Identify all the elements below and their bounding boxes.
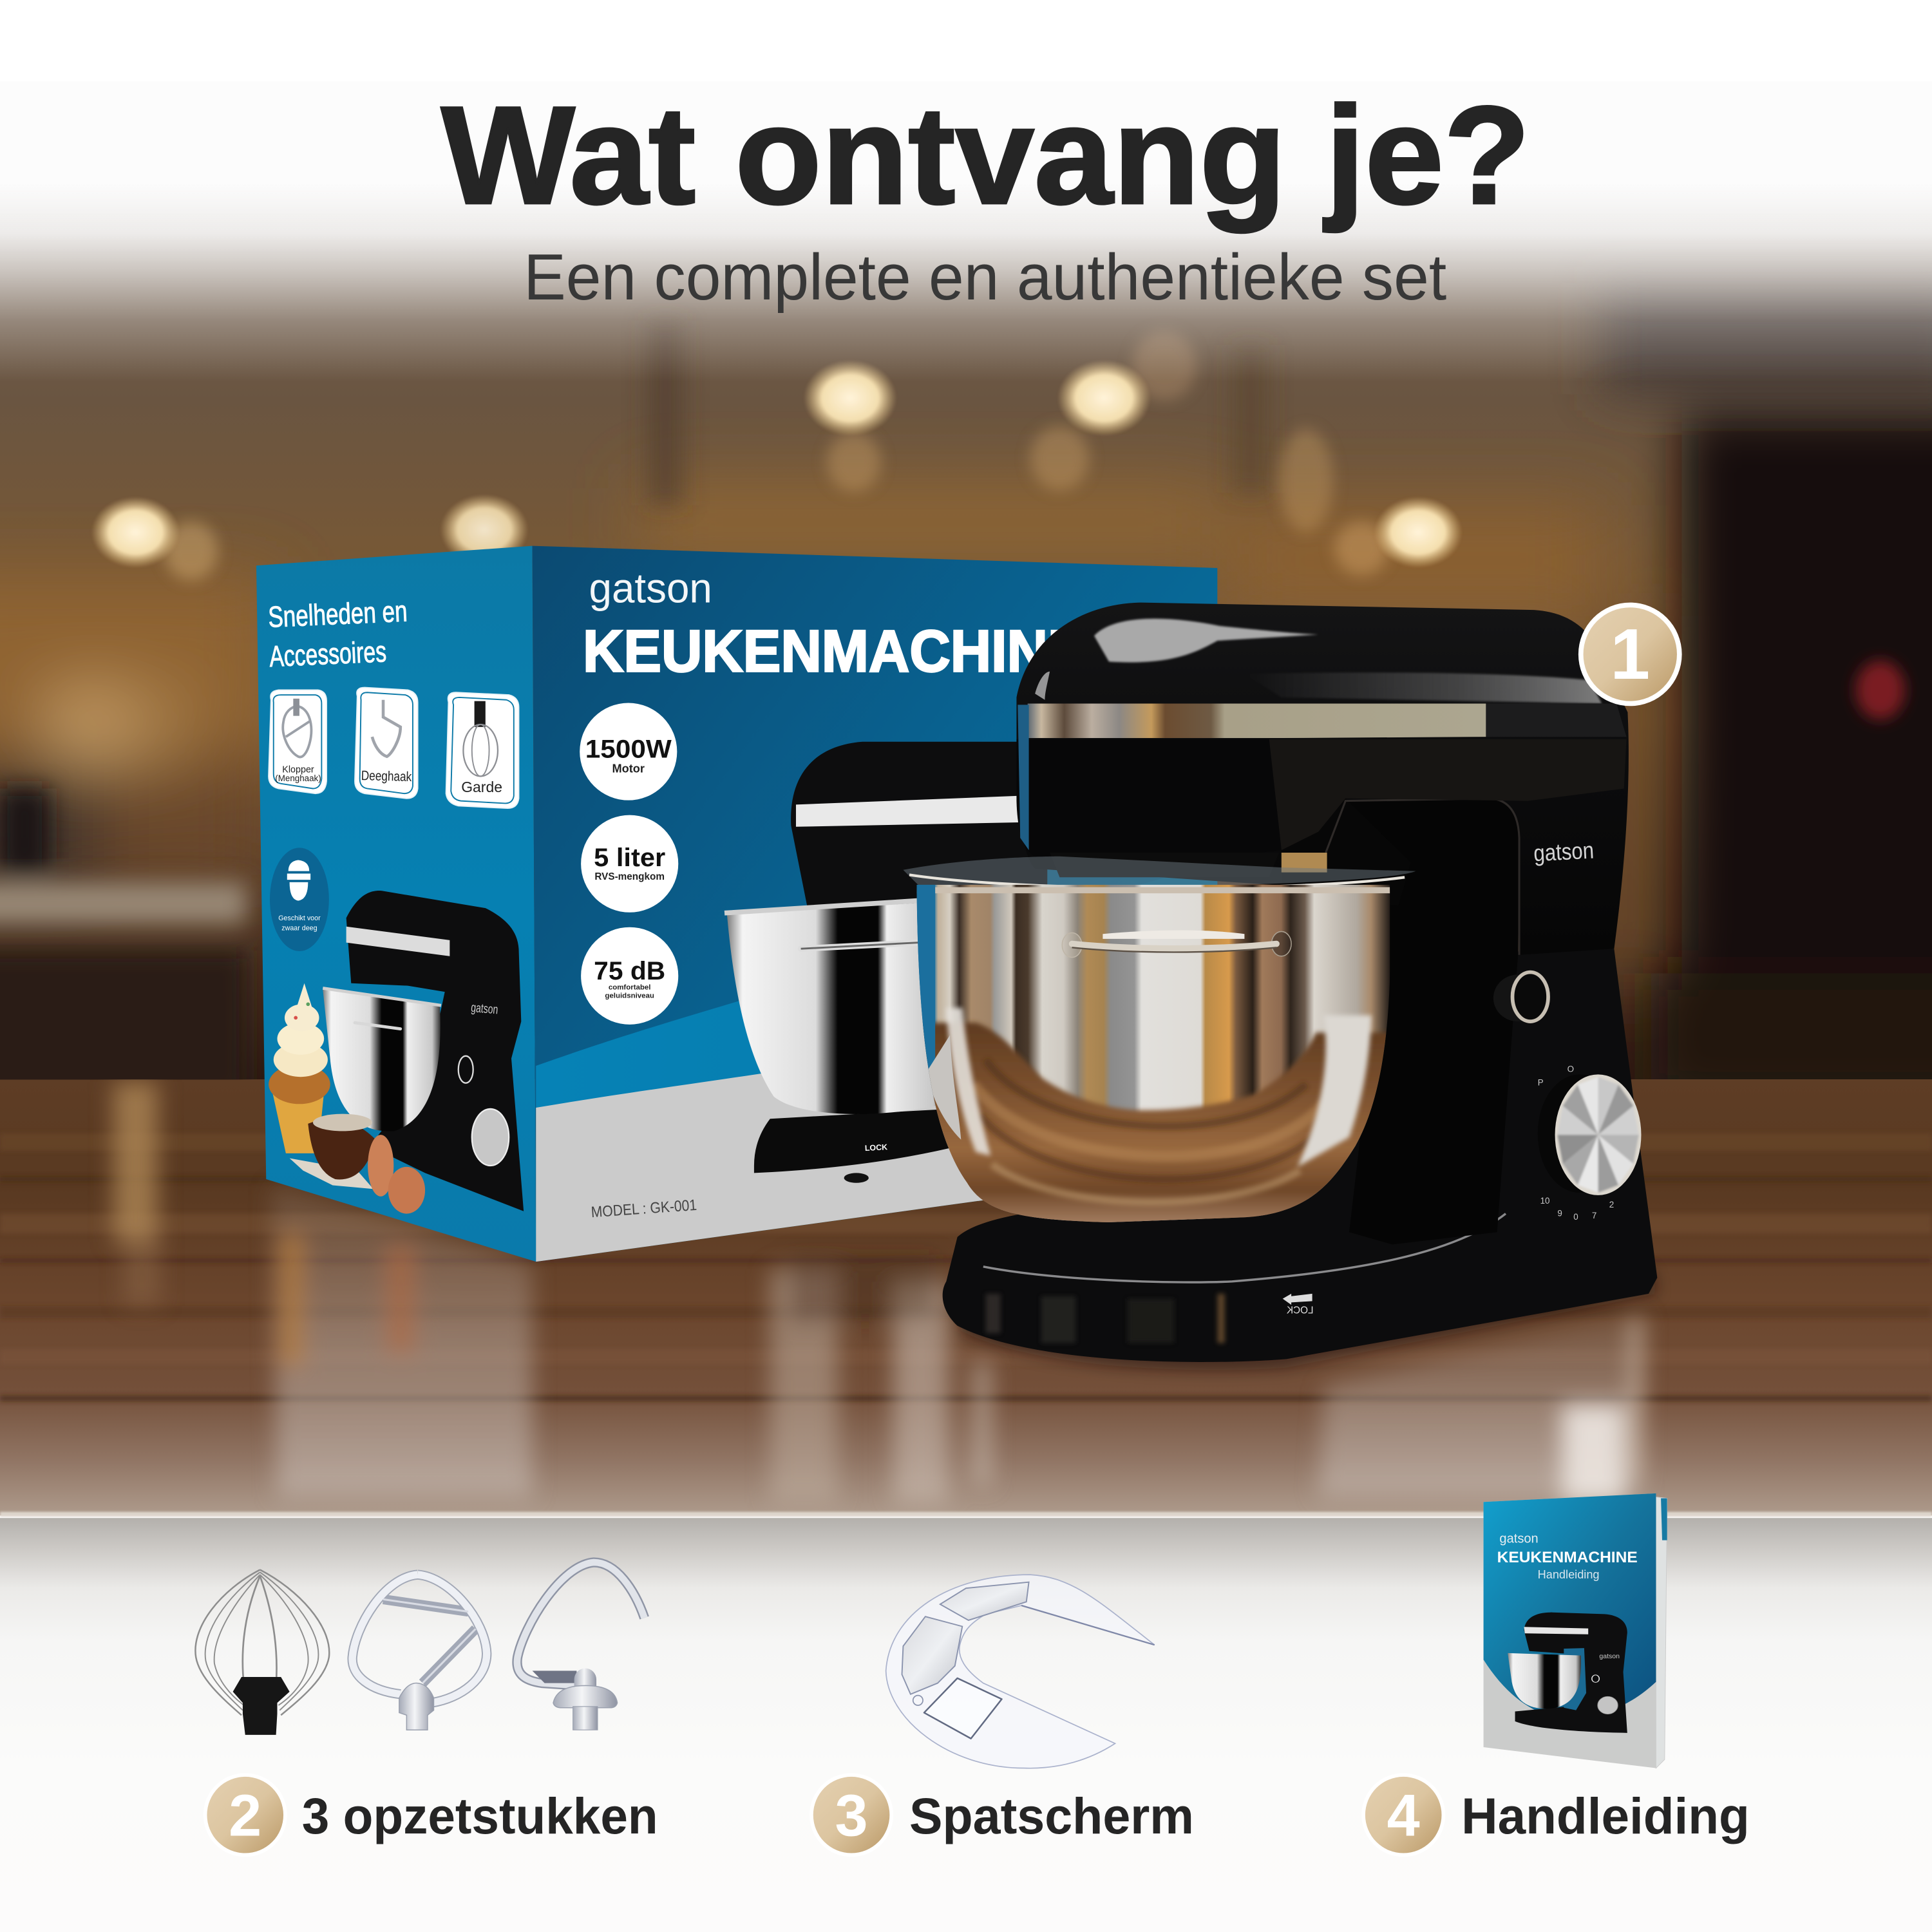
white fade panel at bottom <box>0 1518 1932 1932</box>
gap behind bowl <box>1282 853 1327 873</box>
accessory card: klopper <box>269 690 327 793</box>
spec circle: 5 liter: RVS-mengkom <box>594 871 665 882</box>
number badge 1: 1 <box>1610 614 1650 694</box>
flour bowl and eggs <box>290 1114 425 1214</box>
label: 3 opzetstukken: 3 opzetstukken <box>302 1788 658 1844</box>
badge: geschikt voor zwaar deeg: Geschikt voor <box>278 914 321 922</box>
bowl right highlight <box>1298 1016 1371 1167</box>
knob scale numbers: O <box>1567 1065 1574 1074</box>
mixer column <box>1345 799 1519 1244</box>
item: splash guard <box>886 1575 1155 1768</box>
head blue reflection <box>1018 705 1029 850</box>
label: handleiding: 4 <box>1387 1783 1420 1849</box>
grey lower panel <box>536 1047 1217 1262</box>
title: Wat ontvang je? <box>441 77 1530 233</box>
spec circle: 5 liter <box>581 815 678 913</box>
brand logo on box: gatson <box>589 565 712 612</box>
bowl left highlight <box>946 1008 990 1156</box>
speed knob <box>1538 1065 1641 1222</box>
left face heading: Accessoires <box>269 634 387 673</box>
brand on mixer: gatson <box>1533 837 1595 866</box>
box left face <box>256 546 536 1262</box>
label: spatscherm <box>810 1773 1194 1857</box>
mixer base and body <box>943 949 1657 1362</box>
head gloss highlight <box>1094 619 1318 662</box>
knob scale numbers: 10 <box>1540 1196 1549 1206</box>
base lower reflections <box>986 1294 1225 1343</box>
left face heading <box>267 594 408 673</box>
head side panel tone <box>1269 739 1627 850</box>
bowl wood swirls <box>973 1059 1325 1202</box>
booklet cover <box>1484 1493 1656 1768</box>
accessory card: garde: Garde <box>461 779 502 795</box>
accessory card: klopper: Klopper <box>282 765 314 775</box>
base gloss line <box>983 1214 1506 1282</box>
bokeh lights <box>164 332 1388 580</box>
gatson mini logo: gatson <box>470 1001 498 1017</box>
blurred kitchen wall background <box>0 173 1932 1103</box>
head dome small highlight <box>1035 672 1050 700</box>
spec circle: 75 dB: geluidsniveau <box>605 992 654 1000</box>
subtitle: Een complete en authentieke set <box>524 241 1446 314</box>
booklet title: KEUKENMACHINE <box>1497 1549 1638 1566</box>
badge: geschikt voor zwaar deeg <box>270 848 329 951</box>
model number: MODEL : GK-001 <box>591 1197 697 1221</box>
item: whisk <box>195 1570 329 1735</box>
box front face <box>533 546 1217 1262</box>
accessory card: klopper: (Menghaak) <box>275 773 321 783</box>
neck under arch <box>1282 799 1411 905</box>
booklet mixer image <box>1508 1613 1627 1733</box>
knob scale numbers: 7 <box>1592 1211 1596 1220</box>
accessory card: garde <box>446 692 518 808</box>
number badge 1 <box>1578 603 1682 706</box>
spec circle: 75 dB <box>581 927 678 1025</box>
wood grain bands <box>0 1133 1932 1401</box>
spec circle: 5 liter: 5 liter <box>594 843 666 872</box>
speed ring <box>1493 972 1548 1021</box>
spec circle: 75 dB: 75 dB <box>594 956 665 985</box>
knob scale numbers: P <box>1538 1078 1544 1088</box>
booklet logo: gatson <box>1499 1531 1539 1546</box>
knob scale numbers: 9 <box>1557 1208 1562 1218</box>
accessory card: deeghaak <box>355 688 418 799</box>
spec circle: 1500W: Motor <box>612 762 645 775</box>
trim stripe right section <box>1486 703 1627 737</box>
head arch edge <box>1326 799 1519 955</box>
item: dough hook <box>517 1562 645 1730</box>
label: spatscherm: 3 <box>835 1783 868 1849</box>
booklet subtitle: Handleiding <box>1538 1568 1600 1581</box>
bowl wood reflection <box>916 1023 1392 1232</box>
mixer head back <box>1016 603 1629 955</box>
bowl rim and lid <box>903 853 1416 888</box>
head right gloss <box>1244 672 1602 703</box>
lock label on mixer: LOCK <box>1286 1305 1314 1316</box>
spec circle: 1500W: 1500W <box>585 735 672 764</box>
mixer on left face <box>323 891 524 1211</box>
metal trim stripe <box>1028 703 1486 738</box>
lock label on mixer <box>1283 1294 1314 1316</box>
badge: geschikt voor zwaar deeg: zwaar deeg <box>281 925 317 933</box>
item: flat beater <box>352 1575 487 1730</box>
label: handleiding: Handleiding <box>1461 1788 1750 1844</box>
left face heading: Snelheden en <box>267 594 408 634</box>
lock label on box mixer: LOCK <box>865 1142 887 1153</box>
steel bowl <box>916 885 1392 1232</box>
label: 3 opzetstukken <box>204 1773 658 1857</box>
booklet mixer brand: gatson <box>1599 1653 1620 1660</box>
box product name: KEUKENMACHINE <box>583 619 1086 685</box>
label: 3 opzetstukken: 2 <box>229 1783 261 1849</box>
white fade at top <box>0 0 1932 382</box>
label: handleiding <box>1361 1773 1750 1857</box>
main stand mixer <box>903 603 1657 1370</box>
spec circle: 1500W <box>580 703 677 800</box>
label: spatscherm: Spatscherm <box>909 1788 1194 1844</box>
knob scale numbers: 2 <box>1609 1200 1614 1209</box>
cupcake <box>269 983 330 1153</box>
bowl handle <box>1062 931 1291 958</box>
product box <box>256 546 1217 1262</box>
wooden counter <box>0 1079 1932 1515</box>
light blue wave band <box>536 862 1217 1262</box>
accessory card: deeghaak: Deeghaak <box>361 768 412 784</box>
mixer shadow <box>961 1269 1657 1370</box>
spec circle: 75 dB: comfortabel <box>609 983 650 991</box>
item: manual booklet <box>1484 1493 1667 1768</box>
knob scale numbers: 0 <box>1573 1212 1578 1222</box>
head lower front <box>1016 739 1282 860</box>
mixer illustration on front face <box>724 742 1047 1183</box>
knob scale numbers <box>1538 1065 1614 1222</box>
counter reflections <box>113 1082 1645 1503</box>
booklet spine <box>1656 1497 1667 1768</box>
